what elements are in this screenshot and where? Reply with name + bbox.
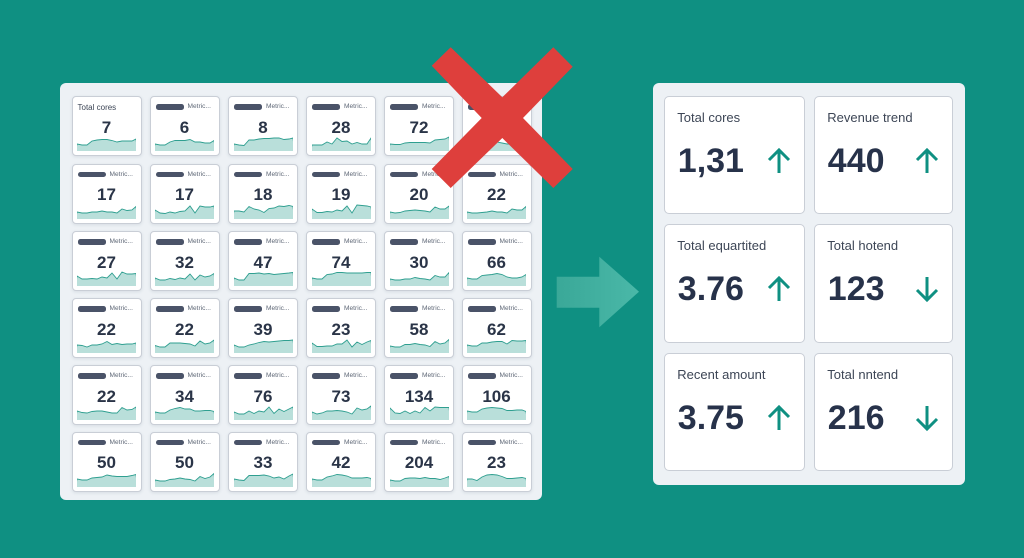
metric card: 22 [150,298,220,358]
metric card: 18: 18 [254,185,272,204]
metric card: 58: Metric... [422,305,445,312]
metric card: 47: 47 [254,252,272,272]
metric card: 74: 74 [332,252,350,272]
metric card: 42: 42 [332,453,350,472]
panel: crowded dashboard [60,83,542,500]
metric card: 23 [462,432,532,492]
metric card: 72 [384,96,454,156]
KPI card: Total nntend: Total nntend [827,367,898,382]
metric card: 30: 30 [410,252,428,272]
metric card: 72: Metric... [422,103,445,110]
metric card: 23: Metric... [500,438,523,446]
metric card: 30: Metric... [422,238,445,245]
metric card: 20: Metric... [422,170,445,178]
metric card: 106: Metric... [500,372,523,379]
metric card: 17: Metric... [188,170,211,178]
metric card: 34 [150,365,220,425]
metric card: 23: 23 [332,320,350,338]
KPI card: Total hotend [814,224,953,343]
metric card: 50: Metric... [188,438,211,446]
metric card: 62: Metric... [500,305,523,312]
metric card: 66: 66 [487,252,506,272]
metric card: 134: 134 [405,386,433,406]
metric card: 28: Metric... [344,103,367,110]
metric card: 32: 32 [175,252,194,272]
metric card: 22: Metric... [500,170,523,178]
metric card: 50: Metric... [110,438,133,446]
metric card: 74: Metric... [344,238,367,245]
metric card: 22: Metric... [188,305,211,312]
metric card: Total cores 7 [72,96,142,156]
metric card: 32 [150,231,220,291]
metric card: 76: Metric... [266,372,289,379]
metric card: 42 [306,432,376,492]
metric card: 23: Metric... [344,305,367,312]
metric card: Total cores 7: Total cores [78,102,116,112]
metric card: 42: Metric... [344,438,367,446]
metric card: 32: Metric... [188,238,211,245]
metric card: 34: Metric... [188,372,211,379]
metric card: 22: 22 [97,320,116,338]
metric card: 22 [462,164,532,224]
KPI card: Total nntend [814,353,953,471]
metric card: 17: 17 [97,185,116,204]
metric card: 33 [228,432,298,492]
metric card: 39: 39 [254,320,272,338]
metric card: 66 [462,231,532,291]
metric card: 106: 106 [482,386,511,406]
KPI card: Recent amount [664,353,805,471]
metric card: 20: 20 [410,185,428,204]
metric card: 22: 22 [487,185,506,204]
metric card: 47 [228,231,298,291]
metric card: 73 [306,365,376,425]
metric card: 76 [228,365,298,425]
panel: focused dashboard [653,83,965,484]
KPI card: Total equartited: Total equartited [677,238,766,253]
metric card: 73: Metric... [344,372,367,379]
metric card: 204 [384,432,454,492]
metric card: 6: Metric... [188,103,211,110]
metric card: 22 [72,365,142,425]
metric card: covered by cross [462,96,532,156]
metric card: 19: Metric... [344,170,367,178]
metric card: 6: 6 [180,118,189,136]
metric card: 28 [306,96,376,156]
metric card: 18: Metric... [266,170,289,178]
metric card: 19 [306,164,376,224]
metric card: 27 [72,231,142,291]
metric card: 8 [228,96,298,156]
metric card: 17 [72,164,142,224]
metric card: 204: 204 [405,453,433,472]
metric card: 18 [228,164,298,224]
metric card: 62: 62 [487,320,506,338]
metric card: 23 [306,298,376,358]
KPI card: Total nntend: 216 [828,399,885,437]
metric card: 8: Metric... [266,103,289,110]
metric card: Total cores 7: 7 [102,118,111,136]
metric card: 22: Metric... [110,305,133,312]
metric card: 204: Metric... [422,438,445,446]
KPI card: Recent amount: Recent amount [677,367,765,382]
metric card: 58 [384,298,454,358]
metric card: 58: 58 [410,320,428,338]
KPI card: Total cores: Total cores [677,110,740,125]
metric card: 62 [462,298,532,358]
KPI card: Revenue trend [814,96,953,214]
metric card: covered by cross: Metric... [500,103,523,110]
KPI card: Total cores [664,96,805,214]
metric card: 17 [150,164,220,224]
KPI card: Recent amount: 3.75 [678,399,744,437]
metric card: 50 [72,432,142,492]
metric card: 30 [384,231,454,291]
metric card: 34: 34 [175,386,194,406]
metric card: 19: 19 [332,185,350,204]
KPI card: Total hotend: 123 [828,270,885,308]
metric card: 22 [72,298,142,358]
metric card: 17: 17 [175,185,194,204]
metric card: 76: 76 [254,386,272,406]
metric card: 22: 22 [97,386,116,406]
metric card: 50: 50 [175,453,194,472]
KPI card: Total equartited: 3.76 [678,270,744,308]
KPI card: Revenue trend: 440 [828,142,885,180]
metric card: 73: 73 [332,386,350,406]
metric card: 74 [306,231,376,291]
KPI card: Total equartited [664,224,805,343]
metric card: 8: 8 [258,118,268,136]
metric card: 66: Metric... [500,238,523,245]
metric card: 22: 22 [175,320,194,338]
metric card: 23: 23 [487,453,506,472]
KPI card: Total cores: 1,31 [678,142,744,180]
metric card: 22: Metric... [110,372,133,379]
metric card: 106 [462,365,532,425]
metric card: 33: 33 [254,453,272,472]
metric card: 6 [150,96,220,156]
metric card: 47: Metric... [266,238,289,245]
metric card: 134 [384,365,454,425]
metric card: 27: Metric... [110,238,133,245]
KPI card: Total hotend: Total hotend [827,238,898,253]
metric card: 72: 72 [410,118,428,136]
KPI card: Revenue trend: Revenue trend [827,110,913,125]
metric card: 39: Metric... [266,305,289,312]
metric card: 17: Metric... [110,170,133,178]
metric card: 33: Metric... [266,438,289,446]
metric card: 20 [384,164,454,224]
metric card: 50 [150,432,220,492]
metric card: 28: 28 [332,118,350,136]
metric card: 27: 27 [97,252,116,272]
metric card: 50: 50 [97,453,116,472]
metric card: 39 [228,298,298,358]
metric card: 134: Metric... [422,372,445,379]
